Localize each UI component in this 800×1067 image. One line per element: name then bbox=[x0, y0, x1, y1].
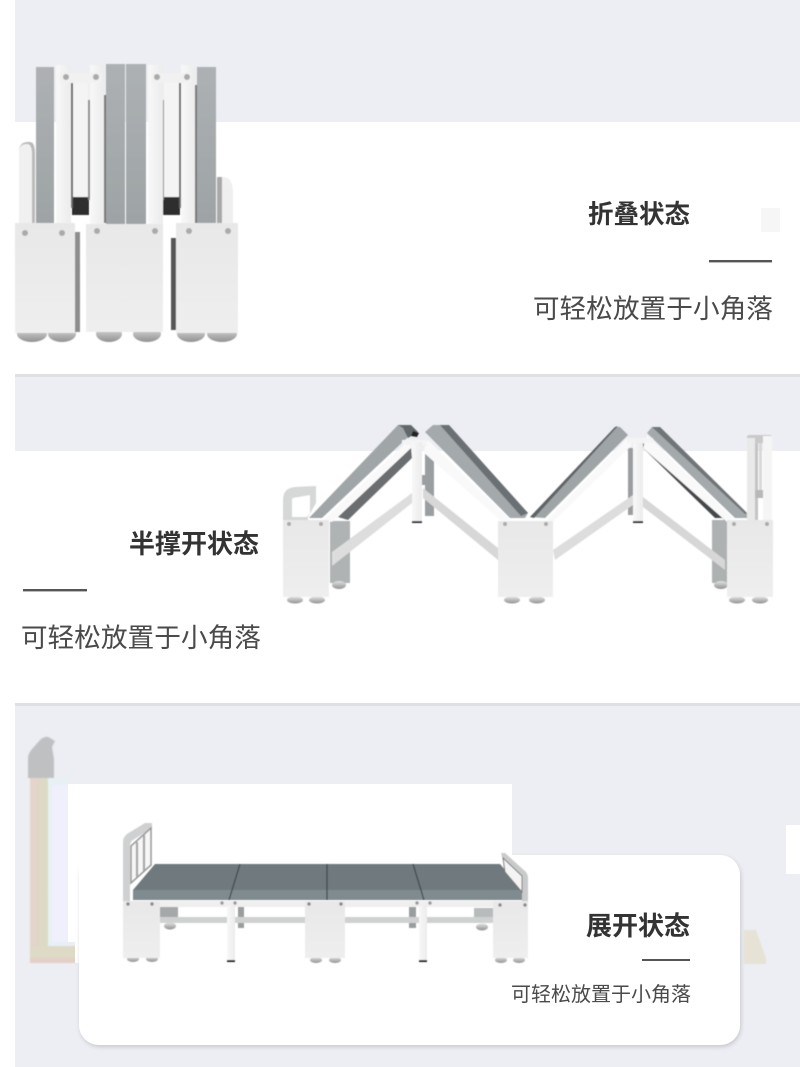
panel: half-open background band bbox=[15, 377, 800, 451]
panel: white backing block bbox=[68, 784, 512, 963]
panel: unfolded background bbox=[15, 706, 800, 1067]
divider: unfolded bbox=[642, 959, 690, 961]
panel: folded background band bbox=[15, 0, 800, 122]
text: unfolded description: 可轻松放置于小角落 bbox=[511, 983, 691, 1006]
panel: white backing overlap bbox=[79, 850, 512, 880]
icon: folded bed bbox=[15, 64, 238, 342]
panel: faint ghost patch bbox=[761, 208, 780, 232]
text: half-open description: 可轻松放置于小角落 bbox=[21, 623, 261, 653]
panel: folded section bottom edge bbox=[15, 374, 800, 377]
icon: ghost remnant right bbox=[744, 930, 766, 964]
panel: unfolded info card bbox=[79, 855, 740, 1045]
heading: folded: 折叠状态 bbox=[588, 201, 690, 229]
icon: half-open bed bbox=[283, 425, 773, 604]
divider: half-open bbox=[23, 589, 87, 591]
heading: unfolded: 展开状态 bbox=[586, 911, 690, 941]
panel: half-open section bottom edge bbox=[15, 703, 800, 706]
panel: white patch right bbox=[786, 825, 800, 874]
text: folded description: 可轻松放置于小角落 bbox=[533, 294, 773, 324]
icon: ghost bed remnant left bbox=[28, 737, 76, 963]
icon: unfolded bed bbox=[123, 823, 528, 963]
heading: half-open: 半撑开状态 bbox=[129, 529, 259, 559]
divider: folded bbox=[709, 260, 772, 262]
